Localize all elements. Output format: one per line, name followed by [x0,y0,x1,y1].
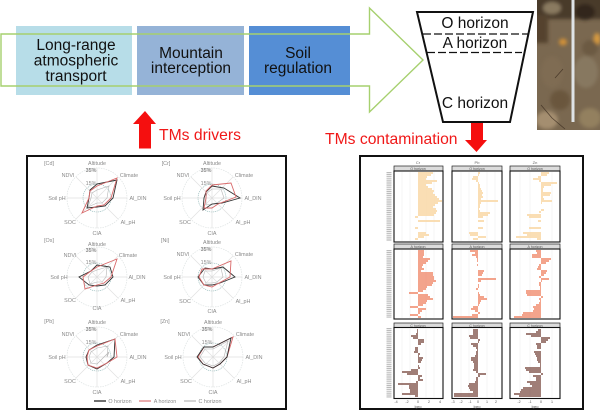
radar chart: Cd: Soil pH [48,196,66,202]
radar chart: Os: 15% [86,260,97,266]
radar chart: Os: Altitude [88,242,106,248]
radar chart: Cr: Al_DIN [244,196,262,202]
radar chart: Pb: [Pb] [44,319,54,325]
radar chart: Os: Al_pH [121,298,135,304]
facet: Pb C horizon [451,323,502,409]
radar chart: Pb: Al_DIN [129,355,147,361]
facet: Cr A horizon [389,244,443,319]
radar chart: Cr: Soil pH [163,196,181,202]
radar chart: Cr: Altitude [203,161,221,167]
radar chart: Cd: SOC [64,220,76,226]
x axis labels: 0 [417,400,419,404]
radar chart: Ni: Al_DIN [244,275,262,281]
x axis labels: -3 [451,400,455,404]
radar legend: A horizon [154,399,176,405]
radar chart: Ni: Al_pH [236,299,250,305]
radar chart: Ni [161,238,262,315]
radar chart: Os: 35% [86,248,97,254]
radar chart: Os: NDVI [64,253,76,259]
radar chart: Cd [44,161,147,237]
radar legend: C horizon [198,399,222,405]
red down arrow: contamination [465,123,487,152]
radar chart: Ni: SOC [179,299,191,305]
column titles: Cr [416,160,421,165]
radar legend: O horizon [108,399,132,405]
radar chart: Zn: SOC [180,379,192,385]
label: A horizon: A horizon [443,35,507,52]
facet: Zn A horizon: A horizon [528,245,542,249]
radar chart: Pb: NDVI [62,332,74,338]
x axis labels: Igeo [532,405,538,409]
facet: Pb A horizon [452,244,502,319]
x axis labels: -1 [528,400,532,404]
process box: long-range atmospheric transport: Long-range [36,37,116,54]
radar chart: Cr: SOC [179,220,191,226]
radar chart: Cd: Altitude [88,161,106,167]
radar chart: Cr: NDVI [177,173,189,179]
x axis labels [394,400,441,409]
radar chart: Ni: NDVI [177,252,189,258]
facet: Cr A horizon: A horizon [411,245,425,249]
radar chart: Cr: Climate [235,173,253,179]
soil profile funnel [417,12,533,122]
radar chart: Cd: 35% [86,168,97,174]
x axis labels: 4 [439,400,441,404]
radar chart: Zn: 15% [202,340,213,346]
radar chart: Os: Al_DIN [128,275,146,281]
radar chart: Cr: CIA [208,231,217,237]
column titles: Zn [533,160,537,165]
radar chart: Zn: [Zn] [160,319,170,325]
radar chart: Cd: Al_DIN [129,196,147,202]
x axis labels: Igeo [414,405,422,409]
column titles [416,160,537,165]
facet: Zn O horizon [510,166,560,242]
label: C horizon: C horizon [442,95,508,112]
x axis labels: -1 [468,400,472,404]
x axis labels: Igeo [474,405,480,409]
process box: soil regulation: Soil [285,45,311,62]
radar chart: Zn: Al_DIN [245,355,263,361]
x axis labels: 2 [428,400,430,404]
radar chart: Zn: Al_pH [237,379,251,385]
radar chart: Cr: 35% [201,168,212,174]
radar chart: Cd: Al_pH [121,220,135,226]
radar chart: Cd: NDVI [62,173,74,179]
radar chart: Ni: Climate [235,252,253,258]
radar chart: Cr: [Cr] [162,161,171,167]
radar chart: Cd: Climate [120,173,138,179]
radar chart: Ni: 15% [201,260,212,266]
facet: Zn A horizon [510,244,560,319]
facet: Zn C horizon: C horizon [527,324,543,328]
panel: radar charts of TMs drivers [27,156,286,409]
large green outline arrow [1,8,423,112]
x axis labels: -4 [394,400,398,404]
radar chart: Pb: Climate [120,332,138,338]
facet: Pb O horizon: O horizon [469,167,485,171]
process box: mountain interception: Mountain [159,45,223,62]
facet: Pb O horizon [452,166,502,242]
label: O horizon: O horizon [441,15,509,32]
facet: Zn C horizon [510,323,560,409]
panel: bar charts of TMs contamination [360,156,583,409]
radar chart: Ni: Soil pH [163,275,181,281]
radar chart: Pb: 15% [86,340,97,346]
x axis labels: -2 [517,400,521,404]
process box: long-range atmospheric transport: transport [45,68,107,85]
x axis labels: 1 [486,400,488,404]
red up arrow: drivers [133,111,156,148]
x axis labels: 0 [540,400,542,404]
process box: mountain interception [137,26,244,95]
facet: Cr C horizon [389,323,443,409]
radar chart: Cd: 15% [86,181,97,187]
radar chart: Cr: Al_pH [236,220,250,226]
radar chart: Ni: [Ni] [161,238,170,244]
radar chart: Cd: CIA [92,231,102,237]
x axis labels: -2 [405,400,409,404]
radar chart: Os: SOC [64,298,76,304]
radar chart: Os [44,238,146,312]
facet: Pb A horizon: A horizon [470,245,484,249]
radar chart: Ni: CIA [208,309,217,315]
radar legend [94,399,222,405]
x axis labels: -2 [459,400,463,404]
radar chart: Cd: [Cd] [44,161,54,167]
radar chart: Zn [160,319,263,396]
process box: long-range atmospheric transport [16,26,132,95]
label: TMs drivers: TMs drivers [159,127,241,144]
radar chart: Pb: 35% [86,327,97,333]
radar chart: Os: Soil pH [50,275,68,281]
process box: soil regulation [249,26,350,95]
radar chart: Os: CIA [92,306,102,312]
radar chart: Pb [44,319,147,396]
radar chart: Zn: Altitude [204,320,222,326]
facet: Zn O horizon: O horizon [527,167,543,171]
radar chart: Ni: Altitude [203,240,221,246]
radar chart: Pb: SOC [64,379,76,385]
process box: soil regulation: regulation [264,60,332,77]
process box: mountain interception: interception [151,60,231,77]
radar chart: Cr [162,161,262,237]
radar chart: Cr: 15% [201,181,212,187]
radar chart: Zn: 35% [202,327,213,333]
facet: Cr O horizon: O horizon [410,167,426,171]
x axis labels [517,400,553,409]
radar chart: Zn: Soil pH [164,355,182,361]
soil profile photo [530,0,600,130]
radar chart: Zn: Climate [236,332,254,338]
radar chart: Os: Climate [119,253,137,259]
radar chart: Zn: NDVI [178,332,190,338]
process box: long-range atmospheric transport: atmospheric [34,52,118,70]
label: TMs contamination: TMs contamination [325,131,458,148]
radar chart: Pb: Altitude [88,320,106,326]
radar chart: Pb: Soil pH [48,355,66,361]
x axis labels: 2 [495,400,497,404]
radar chart: Ni: 35% [201,247,212,253]
radar chart: Pb: Al_pH [121,379,135,385]
x axis labels: 0 [477,400,479,404]
radar chart: Zn: CIA [208,390,218,396]
radar chart: Pb: CIA [92,390,102,396]
x axis labels [451,400,497,409]
column titles: Pb [475,160,480,165]
facet: Pb C horizon: C horizon [469,324,485,328]
facet: Cr O horizon [389,166,443,242]
radar chart: Os: [Os] [44,238,54,244]
x axis labels: 1 [551,400,553,404]
facet: Cr C horizon: C horizon [410,324,426,328]
